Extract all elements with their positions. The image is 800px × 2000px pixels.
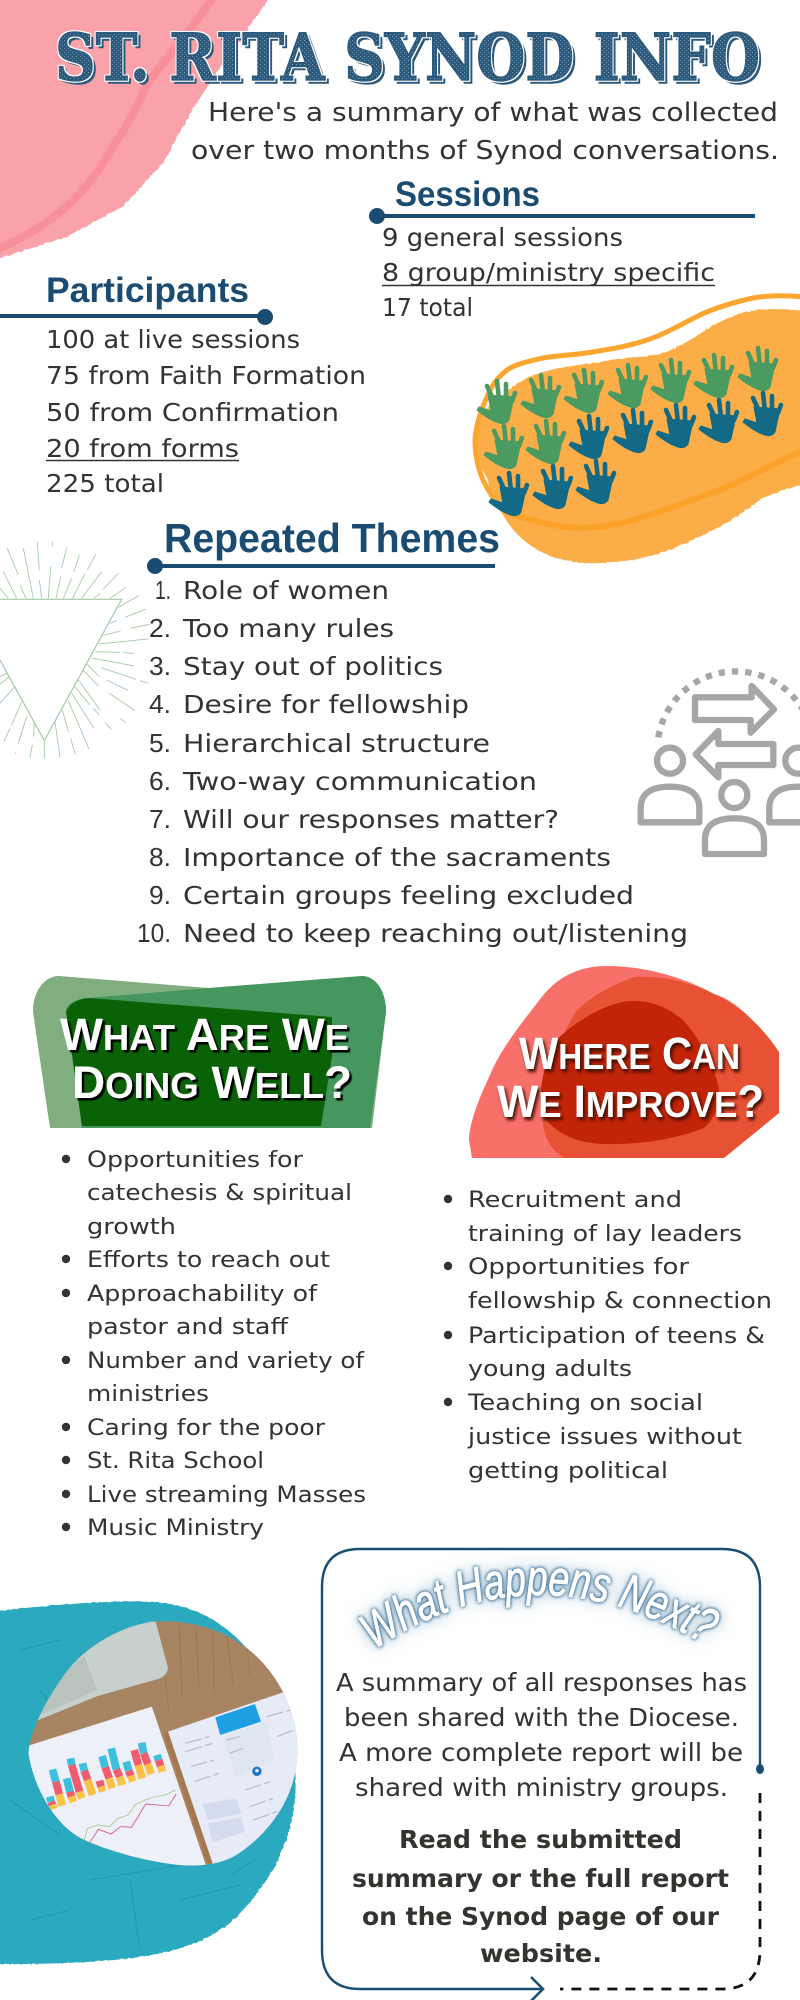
watercolor blob: pink corner	[0, 0, 276, 262]
numbered list: Stay out of politics	[183, 652, 443, 681]
box outline dashed	[560, 1793, 760, 1989]
bullet list: doing well: catechesis & spiritual	[87, 1180, 352, 1206]
icon: green triangle with sunburst rays	[0, 542, 150, 758]
participants list: 50 from Confirmation	[46, 398, 339, 427]
arrow head	[531, 1977, 543, 2000]
teal blob with report photo	[0, 1601, 304, 1964]
numbered list: 2.	[149, 613, 171, 643]
numbered list: Hierarchical structure	[183, 729, 490, 758]
bullet list: improve: young adults	[468, 1356, 632, 1382]
participants list: 20 from forms	[46, 434, 239, 463]
numbered list: Will our responses matter?	[183, 805, 559, 834]
call to action: Read the submitted	[399, 1825, 682, 1854]
bullet list: doing well: Efforts to reach out	[87, 1247, 330, 1273]
body text: been shared with the Diocese.	[344, 1703, 739, 1732]
body text: A more complete report will be	[339, 1738, 743, 1767]
curved heading guide	[374, 1595, 714, 1650]
numbered list: Too many rules	[182, 614, 394, 643]
heading: where can we improve: WHERE CAN	[519, 1028, 740, 1079]
numbered list: Desire for fellowship	[183, 690, 469, 719]
photo: reports on desk	[28, 1621, 298, 1866]
numbered list: Importance of the sacraments	[183, 843, 611, 872]
bullet list: improve: Opportunities for	[468, 1254, 690, 1280]
heading: what are we doing well: WHAT ARE WE	[60, 1009, 349, 1060]
numbered list: 6.	[149, 766, 171, 796]
numbered list: 9.	[149, 880, 171, 910]
red banner shape	[469, 966, 779, 1158]
sessions list: 17 total	[382, 293, 473, 322]
intro text: Here's a summary of what was collected	[208, 98, 778, 128]
bullet list: improve: Recruitment and	[468, 1187, 682, 1213]
bullet list: improve	[444, 1187, 772, 1484]
heading: what happens next: What Happens Next?	[353, 1558, 728, 1653]
bullet list: improve: fellowship & connection	[468, 1288, 772, 1314]
panel: sessions	[369, 175, 755, 322]
box end dot	[756, 1764, 764, 1774]
heading: where can we improve	[497, 1028, 764, 1127]
bullet list: doing well: Opportunities for	[87, 1147, 304, 1173]
numbered list: 8.	[149, 842, 171, 872]
bullet list: improve: Teaching on social	[467, 1390, 703, 1416]
numbered list: 5.	[149, 728, 171, 758]
bullet list: improve: Participation of teens &	[468, 1323, 765, 1349]
participants list: 100 at live sessions	[46, 325, 300, 354]
heading: repeated themes: Repeated Themes	[164, 515, 500, 561]
numbered list: Certain groups feeling excluded	[183, 881, 634, 910]
body text: A summary of all responses has	[336, 1668, 747, 1697]
hands: blue	[489, 393, 781, 516]
numbered list: Need to keep reaching out/listening	[183, 919, 688, 948]
bullet list: doing well: Live streaming Masses	[87, 1482, 366, 1508]
numbered list: Two-way communication	[182, 767, 537, 796]
call to action: website.	[480, 1939, 602, 1968]
panel: participants	[0, 271, 366, 498]
sessions list: 8 group/ministry specific	[382, 258, 715, 287]
heading: where can we improve: WE IMPROVE?	[497, 1076, 764, 1127]
sessions list	[382, 223, 715, 322]
heading: sessions: Sessions	[395, 175, 540, 214]
hands: green	[477, 348, 776, 469]
panel: what happens next	[320, 1548, 764, 2000]
green banner shape	[33, 976, 386, 1128]
sessions list: 9 general sessions	[382, 223, 623, 252]
bullet list: doing well: growth	[87, 1214, 176, 1240]
numbered list: 1.	[155, 575, 171, 605]
call to action: on the Synod page of our	[362, 1902, 720, 1931]
icon: people exchanging arrows	[641, 671, 800, 854]
panel: repeated themes	[137, 515, 688, 948]
participants list: 225 total	[46, 469, 164, 498]
icon: orange blob with hands	[475, 296, 800, 563]
bullet list: improve: getting political	[468, 1458, 668, 1484]
bullet list: doing well: Approachability of	[87, 1281, 318, 1307]
intro text: over two months of Synod conversations.	[191, 136, 779, 166]
panel: where can we improve	[444, 966, 779, 1484]
bullet list: doing well	[62, 1147, 366, 1541]
heading rule with dot	[369, 208, 755, 224]
bullet list: doing well: Music Ministry	[87, 1515, 264, 1541]
bullet list: doing well: St. Rita School	[87, 1448, 264, 1474]
bullet list: doing well: Number and variety of	[87, 1348, 365, 1374]
numbered list: 10.	[137, 918, 171, 948]
body text: shared with ministry groups.	[355, 1773, 728, 1802]
intro text	[191, 98, 779, 166]
body text	[336, 1668, 747, 1802]
numbered list: 7.	[149, 804, 171, 834]
numbered list: 3.	[149, 651, 171, 681]
panel: what are we doing well	[33, 976, 386, 1541]
call to action	[352, 1825, 729, 1968]
heading: what are we doing well: DOING WELL?	[72, 1057, 352, 1108]
box outline solid	[322, 1549, 760, 1989]
numbered list	[137, 575, 688, 948]
bullet list: improve: training of lay leaders	[468, 1221, 742, 1247]
bullet list: doing well: Caring for the poor	[87, 1415, 326, 1441]
numbered list: 4.	[149, 689, 171, 719]
heading: participants: Participants	[46, 271, 249, 310]
heading rule with dot	[147, 558, 495, 574]
heading rule with dot	[0, 309, 273, 325]
numbered list: Role of women	[183, 576, 389, 605]
bullet list: doing well: pastor and staff	[87, 1314, 289, 1340]
participants list	[46, 325, 366, 498]
participants list: 75 from Faith Formation	[46, 361, 366, 390]
heading: what are we doing well	[60, 1009, 352, 1108]
bullet list: improve: justice issues without	[467, 1424, 742, 1450]
call to action: summary or the full report	[352, 1864, 729, 1893]
bullet list: doing well: ministries	[87, 1381, 209, 1407]
